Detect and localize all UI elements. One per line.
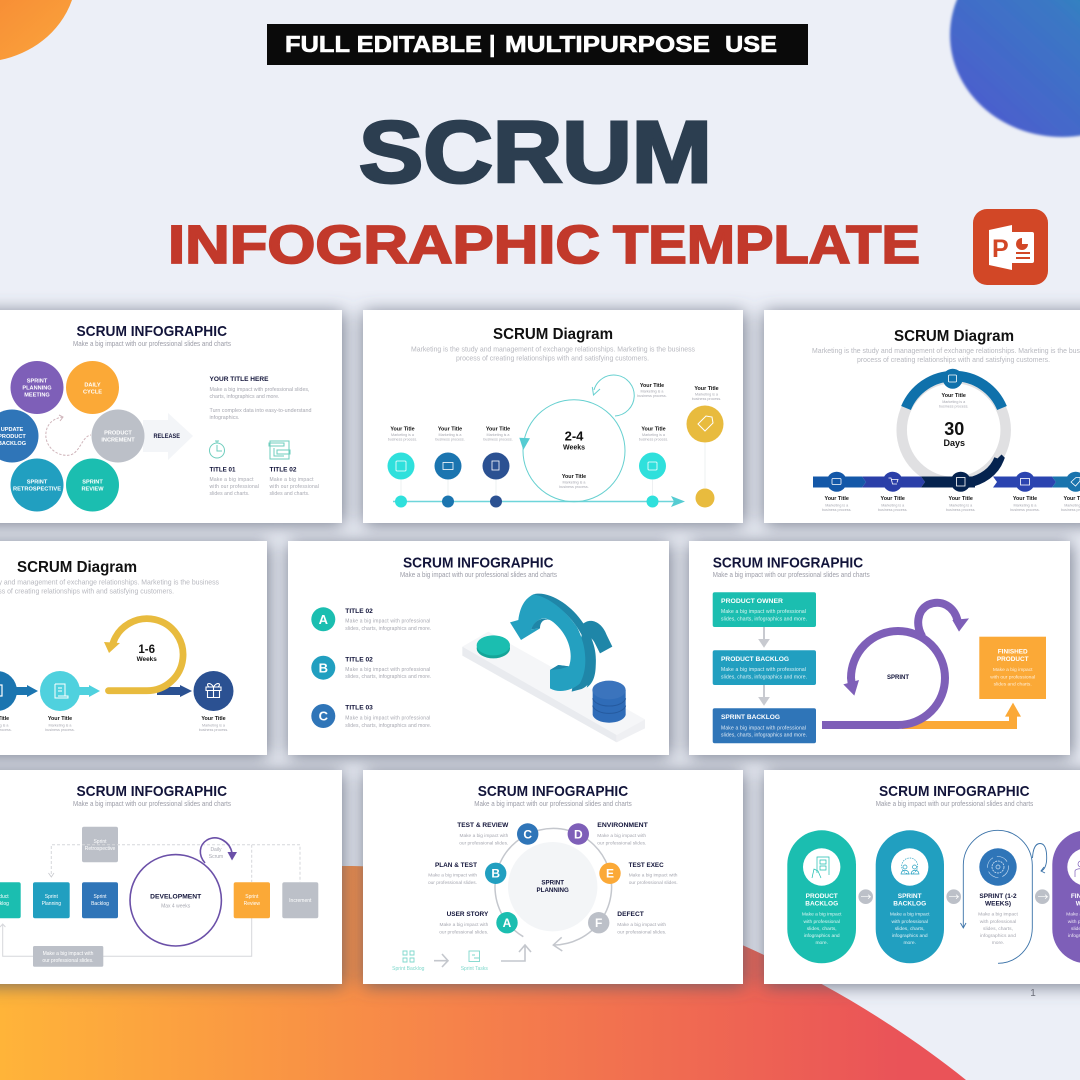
item F defect: F xyxy=(595,916,602,930)
step 2: Your Title xyxy=(881,496,905,502)
subheading: Make a big impact with our professional slides and charts xyxy=(73,799,231,808)
circle: sprint planning meeting: SPRINT xyxy=(27,378,48,384)
item B: Make a big impact with professional xyxy=(345,667,430,673)
pill: sprint backlog: Make a big impact xyxy=(890,912,930,918)
ribbon xyxy=(813,476,1080,488)
pill: product backlog: Make a big impact xyxy=(802,912,842,918)
subtitle: infographic template: TEMPLATE xyxy=(613,215,920,275)
item C test and review: our professional slides. xyxy=(459,840,508,846)
node 2: business process. xyxy=(435,438,465,442)
label: 1-6 weeks xyxy=(137,644,157,663)
item A: slides, charts, infographics and more. xyxy=(345,626,431,632)
node: your title centre: business process. xyxy=(559,485,589,489)
box: sprint retrospective: Sprint xyxy=(93,839,107,845)
item C test and review: C xyxy=(523,827,532,841)
step 2: Marketing is a xyxy=(881,504,905,508)
icon: PowerPoint: P xyxy=(992,235,1009,263)
icon and label: sprint backlog: Sprint Backlog xyxy=(392,966,425,972)
step 4: Marketing is a xyxy=(1014,504,1037,508)
item E test exec: our professional slides. xyxy=(629,880,678,886)
node 1 xyxy=(388,426,417,508)
heading: SCRUM INFOGRAPHIC xyxy=(713,554,863,572)
icon and label: sprint tasks: Sprint Tasks xyxy=(461,966,488,972)
step 1: Your Title xyxy=(825,496,849,502)
box: product backlog: PRODUCT BACKLOG xyxy=(721,656,789,663)
heading: SCRUM Diagram xyxy=(17,559,137,576)
circle: sprint planning meeting xyxy=(10,361,64,414)
text block: title 01: Make a big impact xyxy=(210,477,254,483)
box: product backlog xyxy=(713,650,816,685)
label: 1-6 weeks: Weeks xyxy=(137,656,157,663)
item A user story xyxy=(439,911,518,935)
item D environment: our professional slides. xyxy=(597,840,646,846)
item C test and review: Make a big impact with xyxy=(460,833,509,839)
subheading: Make a big impact with our professional slides and charts xyxy=(73,339,231,348)
item C: Make a big impact with professional xyxy=(345,716,430,722)
box: product owner xyxy=(713,592,816,627)
box: product owner: PRODUCT OWNER xyxy=(721,598,783,605)
box: sprint retrospective: Retrospective xyxy=(85,846,115,852)
box: sprint review: Sprint xyxy=(245,894,259,900)
step turquoise: Marketing is a xyxy=(49,724,72,728)
circle: daily cycle: DAILY xyxy=(84,382,101,388)
box: sprint backlog xyxy=(82,882,118,918)
text block: title 02: TITLE 02 xyxy=(270,466,297,474)
description: Marketing is the study and management of exchange relationships. Marketing is the business xyxy=(411,344,695,354)
box: increment xyxy=(282,882,318,918)
item B xyxy=(311,656,431,680)
circle: sprint review xyxy=(66,458,119,512)
item A user story: A xyxy=(503,916,512,930)
connector arrow 3 xyxy=(1035,889,1050,904)
box: product owner: slides, charts, infographics and more. xyxy=(721,616,807,622)
arrow down 1 xyxy=(760,627,768,646)
label: 30 days: 30 xyxy=(944,419,964,439)
text block: your title here: YOUR TITLE HERE xyxy=(210,376,269,383)
node 5 gold: Marketing is a xyxy=(695,392,719,396)
corner blob: blue xyxy=(950,0,1080,137)
step 3 xyxy=(946,472,975,512)
panel: slide 8 sprint planning xyxy=(363,770,743,984)
heading: SCRUM INFOGRAPHIC xyxy=(76,783,227,800)
item C xyxy=(311,704,431,729)
item D environment: Make a big impact with xyxy=(597,833,646,839)
arrow navy xyxy=(157,685,192,697)
panel: slide 2 scrum diagram timeline xyxy=(363,310,743,523)
item B: B xyxy=(319,660,328,675)
banner: full editable: | xyxy=(489,31,495,57)
node 3 xyxy=(482,426,513,508)
centre: sprint planning: SPRINT xyxy=(541,880,564,886)
step 2 xyxy=(878,472,907,512)
step 1 xyxy=(822,472,851,512)
step navy xyxy=(194,671,234,732)
circle: update product backlog xyxy=(0,410,38,462)
box: finished product: FINISHED xyxy=(998,648,1028,656)
pill: sprint backlog: SPRINT xyxy=(898,893,922,900)
subheading: Make a big impact with our professional slides and charts xyxy=(400,570,557,579)
node 4: Your Title xyxy=(641,426,666,432)
label: 30 days xyxy=(944,419,965,448)
circle: product increment xyxy=(92,410,144,462)
node 5 gold xyxy=(686,386,724,508)
sprint content: Make a big impact xyxy=(978,912,1018,918)
circle: sprint review: REVIEW xyxy=(81,486,104,492)
top label: Marketing is a xyxy=(942,400,966,404)
step navy: business process. xyxy=(199,728,228,732)
item A: TITLE 02 xyxy=(345,608,373,615)
box: finished product xyxy=(979,637,1046,699)
pill: product backlog: slides, charts, xyxy=(807,926,837,932)
item A user story: Make a big impact with xyxy=(440,922,489,928)
box: sprint review xyxy=(234,882,270,918)
node 5 gold: Your Title xyxy=(694,386,719,392)
development circle: DEVELOPMENT xyxy=(150,894,201,900)
item A user story: USER STORY xyxy=(447,911,489,918)
text block: title 02 xyxy=(270,466,319,497)
pill: sprint backlog xyxy=(876,830,944,963)
description xyxy=(812,346,1080,364)
title: SCRUM: SCRUM xyxy=(359,104,712,201)
pill: product backlog: BACKLOG xyxy=(805,900,838,908)
text block: title 01: slides and charts. xyxy=(210,491,250,497)
step 4: business process. xyxy=(1010,508,1040,512)
item B: slides, charts, infographics and more. xyxy=(345,674,431,680)
corner blob: orange xyxy=(0,0,72,60)
circle: sprint retrospective xyxy=(10,458,64,512)
item A: A xyxy=(319,612,329,627)
box: sprint backlog xyxy=(713,708,816,743)
label: 30 days: Days xyxy=(944,438,965,448)
circle: product increment: PRODUCT xyxy=(104,430,132,436)
item E test exec: E xyxy=(606,867,614,881)
panel: slide 1 scrum cycle xyxy=(0,310,342,523)
circle: sprint review: SPRINT xyxy=(82,480,103,486)
box: sprint planning: Sprint xyxy=(45,894,58,900)
box: sprint backlog: Sprint xyxy=(93,894,107,900)
step blue xyxy=(0,671,17,732)
node 3: Your Title xyxy=(486,426,510,432)
text block: your title here: charts, infographics and more. xyxy=(210,394,280,400)
item F defect: DEFECT xyxy=(617,911,644,918)
label: 2-4 weeks xyxy=(563,428,585,452)
text block: title 01 xyxy=(210,466,259,497)
step 3: Marketing is a xyxy=(949,504,973,508)
heading: SCRUM INFOGRAPHIC xyxy=(76,323,227,340)
box: product backlog: Make a big impact with professional xyxy=(721,667,806,673)
text block: title 02: slides and charts. xyxy=(270,491,310,497)
subheading: Make a big impact with our professional slides and charts xyxy=(713,570,870,579)
box: sprint backlog: slides, charts, infographics and more. xyxy=(721,732,807,738)
node 1: Your Title xyxy=(390,426,415,432)
item C test and review: TEST & REVIEW xyxy=(457,822,508,829)
solid feedback line xyxy=(0,918,252,956)
node 1: business process. xyxy=(388,438,417,442)
item A user story: our professional slides. xyxy=(439,929,488,935)
subheading: Make a big impact with our professional slides and charts xyxy=(474,799,632,808)
item E test exec xyxy=(599,862,678,886)
item D environment: ENVIRONMENT xyxy=(597,822,648,829)
circle: sprint planning meeting: PLANNING xyxy=(22,386,52,392)
bottom gradient wave xyxy=(0,866,966,1080)
sprint content: more. xyxy=(992,940,1004,946)
node 2 xyxy=(434,426,465,508)
item B plan and test: PLAN & TEST xyxy=(435,862,477,869)
pill: product backlog xyxy=(787,830,856,963)
circle: sprint retrospective: RETROSPECTIVE xyxy=(13,486,61,492)
sprint content xyxy=(978,848,1018,946)
step turquoise: Your Title xyxy=(48,716,72,722)
item C: C xyxy=(319,709,329,724)
box: sprint backlog: Make a big impact with professional xyxy=(721,725,806,731)
icon: PowerPoint xyxy=(973,209,1048,285)
small loop arrow xyxy=(592,375,634,416)
item E test exec: TEST EXEC xyxy=(629,862,664,869)
subheading: Make a big impact with our professional slides and charts xyxy=(876,799,1034,808)
text block: your title here: infographics. xyxy=(210,415,240,421)
pill: sprint backlog: BACKLOG xyxy=(893,900,926,908)
box: product backlog: slides, charts, infographics and more. xyxy=(721,674,807,680)
circle: update product backlog: UPDATE xyxy=(1,427,24,433)
daily scrum arrow xyxy=(200,838,237,863)
sprint content: slides, charts, xyxy=(983,926,1013,932)
sprint content: WEEKS) xyxy=(985,900,1011,908)
circle: product increment: INCREMENT xyxy=(101,438,135,444)
text block: your title here xyxy=(210,376,312,421)
item B plan and test: B xyxy=(491,867,500,881)
sprint content: with professional xyxy=(980,919,1016,925)
circle: sprint planning meeting: MEETING xyxy=(24,392,50,398)
node 2: Your Title xyxy=(438,426,462,432)
pill: product backlog: with professional xyxy=(803,919,840,925)
step 4: Your Title xyxy=(1013,496,1037,502)
panel: slide 9 pills xyxy=(764,770,1080,984)
loop label xyxy=(637,383,667,398)
connector stems xyxy=(401,443,705,495)
loop label: Marketing is a xyxy=(641,390,664,394)
connector arrow 2 xyxy=(946,889,961,904)
box: product backlog xyxy=(0,882,21,918)
box: sprint backlog: SPRINT BACKLOG xyxy=(721,714,780,721)
pill: sprint backlog: slides, charts, xyxy=(895,926,925,932)
label: 1-6 weeks: 1-6 xyxy=(138,644,155,656)
subtitle: infographic template xyxy=(168,215,920,275)
node: your title centre: Marketing is a xyxy=(563,480,586,484)
text block: title 01: TITLE 01 xyxy=(210,466,236,474)
big cycle circle xyxy=(523,400,625,502)
banner: full editable: USE xyxy=(725,31,777,57)
loop label: Your Title xyxy=(640,383,664,389)
node 2: Marketing is a xyxy=(439,433,462,437)
box: product owner: Make a big impact with professional xyxy=(721,609,806,615)
banner: full editable xyxy=(267,24,808,65)
item D environment: D xyxy=(574,827,583,841)
box: sprint planning xyxy=(33,882,70,918)
circle: daily cycle xyxy=(66,361,119,414)
item E test exec: Make a big impact with xyxy=(629,873,678,879)
centre: sprint planning xyxy=(508,842,597,931)
item B plan and test xyxy=(428,862,506,886)
pill: finished work xyxy=(1052,830,1080,963)
pill: sprint backlog: with professional xyxy=(891,919,928,925)
pill: sprint backlog: infographics and xyxy=(892,933,928,939)
dashed cycle arrow xyxy=(46,415,91,455)
flow arrows xyxy=(434,945,531,967)
box: finished product: Make a big impact xyxy=(993,667,1033,673)
sprint content: infographics and xyxy=(980,933,1016,939)
step 1: Marketing is a xyxy=(825,504,849,508)
step turquoise: business process. xyxy=(45,728,75,732)
text block: your title here: Turn complex data into easy-to-understand xyxy=(210,408,312,414)
step navy: Marketing is a xyxy=(202,724,226,728)
node: your title centre xyxy=(559,474,589,489)
description: process of creating relationships with and satisfying customers. xyxy=(857,355,1050,364)
pill: product backlog: infographics and xyxy=(804,933,840,939)
dashed arrowhead xyxy=(48,873,54,877)
step navy: Your Title xyxy=(201,716,226,722)
label: sprint: SPRINT xyxy=(887,675,909,681)
release arrow xyxy=(143,413,193,460)
development circle: Max 4 weeks xyxy=(161,904,191,910)
top label: business process. xyxy=(939,404,968,408)
big cycle arrowhead xyxy=(519,438,530,450)
step 4 xyxy=(1010,472,1040,512)
heading: SCRUM Diagram xyxy=(894,328,1014,345)
box: note: Make a big impact with xyxy=(43,951,94,957)
circle: sprint retrospective: SPRINT xyxy=(27,480,48,486)
top label xyxy=(939,393,968,408)
banner: full editable: FULL EDITABLE xyxy=(285,31,482,57)
panel: slide 6 sprint flow xyxy=(689,541,1070,755)
isometric scrum arrow xyxy=(462,594,645,742)
planning ring xyxy=(495,828,612,951)
node 4 xyxy=(639,426,668,508)
banner: full editable: MULTIPURPOSE xyxy=(505,31,710,57)
icon and label: sprint tasks xyxy=(461,951,488,972)
item B plan and test: Make a big impact with xyxy=(428,873,477,879)
dashed feedback lines xyxy=(51,845,300,882)
heading: SCRUM INFOGRAPHIC xyxy=(478,783,628,800)
pill: sprint backlog: more. xyxy=(903,940,916,946)
text block: title 01: with our professional xyxy=(210,484,259,490)
heading: SCRUM INFOGRAPHIC xyxy=(879,783,1030,800)
circle: daily cycle: CYCLE xyxy=(83,390,102,396)
badge top xyxy=(943,369,963,389)
box: finished product: with our professional xyxy=(990,674,1035,680)
box: note xyxy=(33,946,103,967)
sprint content: SPRINT (1-2 xyxy=(979,893,1017,900)
sprint arrows xyxy=(822,603,1021,729)
node 1: Marketing is a xyxy=(391,433,415,437)
step turquoise xyxy=(40,671,80,732)
box: sprint retrospective xyxy=(82,827,118,862)
pill: product backlog: PRODUCT xyxy=(806,893,838,900)
item F defect xyxy=(588,911,666,935)
label: 2-4 weeks: Weeks xyxy=(563,444,585,452)
icon: board xyxy=(269,441,290,459)
step 5 xyxy=(1061,472,1080,512)
step 1: business process. xyxy=(822,508,851,512)
icon and label: sprint backlog xyxy=(392,951,425,972)
development circle xyxy=(130,855,221,946)
item C test and review xyxy=(457,822,538,846)
text block: your title here: Make a big impact with professional slides, xyxy=(210,387,310,393)
description xyxy=(0,578,219,596)
release label: RELEASE xyxy=(154,434,180,440)
icon: stopwatch xyxy=(210,441,224,458)
heading: SCRUM INFOGRAPHIC xyxy=(403,554,554,572)
node 3: business process. xyxy=(483,438,513,442)
panel: slide 3 30 days ring xyxy=(764,310,1080,523)
top label: Your Title xyxy=(942,393,966,399)
page number: 1 xyxy=(1030,988,1036,999)
timeline arrow xyxy=(393,496,685,507)
connector arrow 1 xyxy=(858,889,873,904)
item C: slides, charts, infographics and more. xyxy=(345,723,431,729)
daily scrum arrow: Daily xyxy=(210,847,222,853)
centre: sprint planning: PLANNING xyxy=(537,887,569,894)
item A: Make a big impact with professional xyxy=(345,618,430,624)
arrow down 2 xyxy=(760,685,768,704)
node 4: Marketing is a xyxy=(642,433,666,437)
subtitle: infographic template: INFOGRAPHIC xyxy=(168,215,600,275)
panel: slide 7 development xyxy=(0,770,342,984)
item C: TITLE 03 xyxy=(345,705,373,712)
description xyxy=(411,344,695,362)
daily scrum arrow: Scrum xyxy=(209,854,223,860)
node 5 gold: business process. xyxy=(692,397,721,401)
gold loop arrow xyxy=(104,619,183,691)
box: sprint planning: Planning xyxy=(42,901,61,907)
box: finished product: PRODUCT xyxy=(997,656,1029,663)
box: sprint review: Review xyxy=(244,901,260,907)
item D environment xyxy=(568,822,648,846)
outline loop: sprint xyxy=(960,830,1047,963)
blue arc xyxy=(906,376,1002,408)
box: finished product: slides and charts. xyxy=(994,682,1032,688)
box: sprint backlog: Backlog xyxy=(91,901,109,907)
node: your title centre: Your Title xyxy=(562,474,586,480)
slide shadows xyxy=(0,312,1080,986)
text block: title 02: with our professional xyxy=(270,484,319,490)
heading: SCRUM Diagram xyxy=(493,326,613,343)
description: process of creating relationships with and satisfying customers. xyxy=(456,354,649,362)
node 3: Marketing is a xyxy=(487,433,510,437)
panel: slide 5 isometric xyxy=(288,541,669,755)
text block: title 02: Make a big impact xyxy=(270,477,314,483)
pill: product backlog: more. xyxy=(815,940,828,946)
node 4: business process. xyxy=(639,438,668,442)
label: 2-4 weeks: 2-4 xyxy=(565,428,584,444)
item B plan and test: our professional slides. xyxy=(428,880,477,886)
panel: slide 4 1-6 weeks xyxy=(0,541,267,755)
item A xyxy=(311,607,431,632)
loop label: business process. xyxy=(637,394,667,398)
item F defect: Make a big impact with xyxy=(617,922,666,928)
item F defect: our professional slides. xyxy=(617,929,666,935)
box: note: our professional slides. xyxy=(42,958,94,964)
step 3: business process. xyxy=(946,508,975,512)
dark arc xyxy=(967,458,999,483)
step 3: Your Title xyxy=(949,496,973,502)
grey ring xyxy=(902,378,1006,482)
arrow blue xyxy=(14,685,38,697)
step 2: business process. xyxy=(878,508,907,512)
item B: TITLE 02 xyxy=(345,656,373,663)
box: increment: Increment xyxy=(289,898,312,904)
arrow turquoise xyxy=(78,685,100,697)
